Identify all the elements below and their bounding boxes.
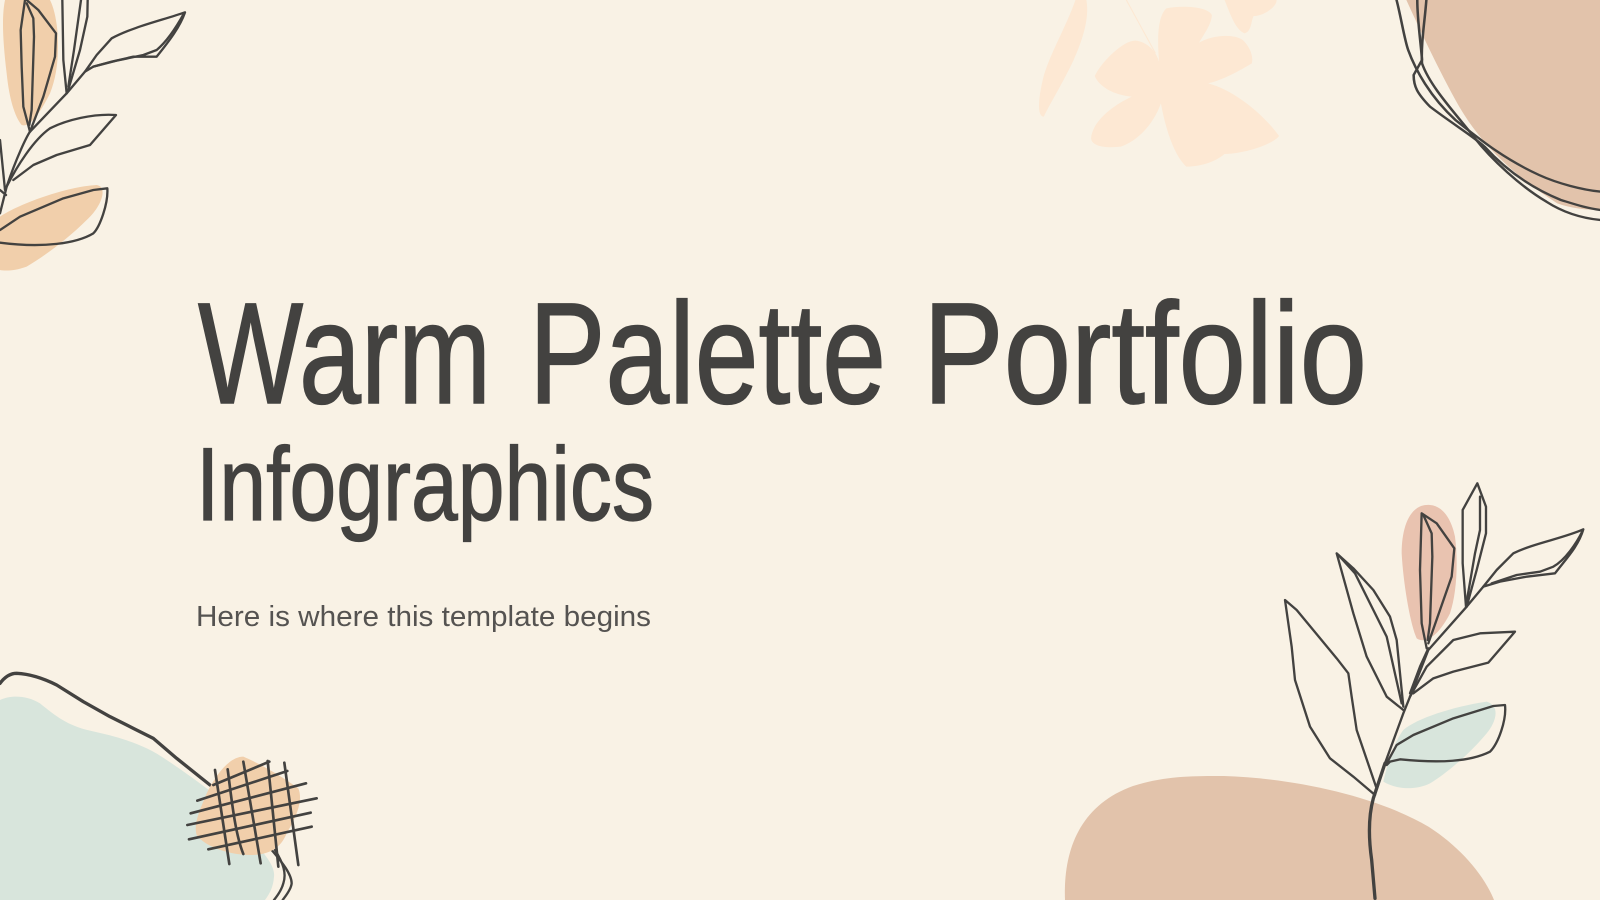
bottom left mint blob	[0, 673, 317, 900]
tagline: Here is where this template begins	[196, 601, 651, 633]
looping wire line	[0, 673, 292, 900]
top left leaf sprig	[0, 0, 185, 271]
crosshatched peach blob	[187, 757, 317, 867]
top right tan blob with line outlines	[1397, 0, 1600, 220]
title: Portfolio	[923, 273, 1367, 434]
bottom right tan blob	[1065, 776, 1494, 900]
title: Palette	[529, 273, 886, 434]
faded peach flower	[1039, 0, 1279, 167]
title	[198, 273, 1367, 434]
bottom right leaf sprig	[1285, 483, 1583, 898]
title: Warm	[198, 273, 491, 434]
subtitle: Infographics: Infographics	[196, 427, 654, 543]
